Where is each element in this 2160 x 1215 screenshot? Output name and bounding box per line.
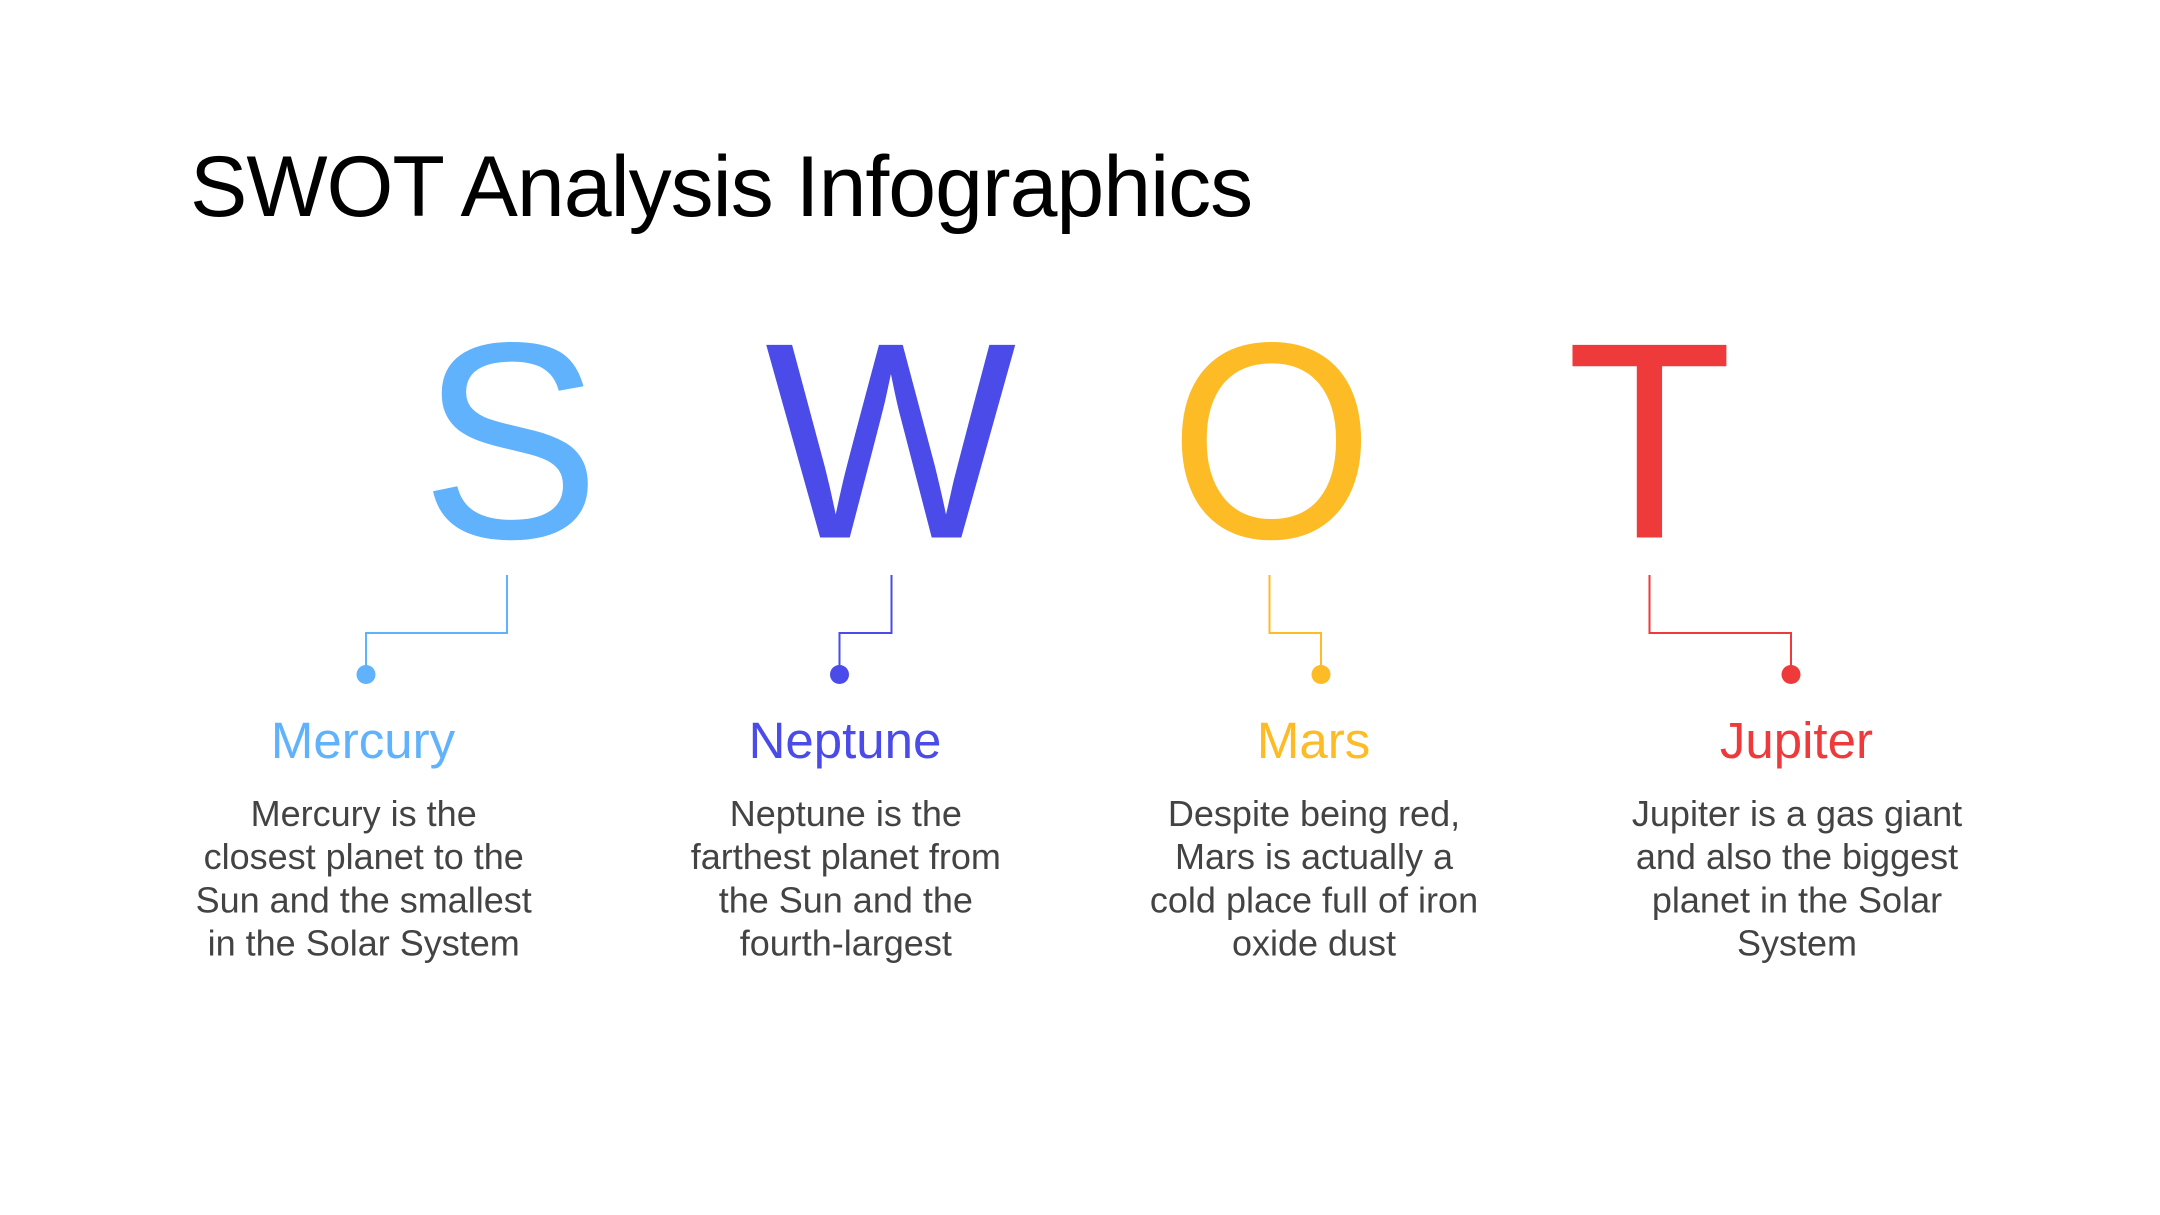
text block Mercury: in the Solar System	[208, 923, 520, 964]
text block Mars: oxide dust	[1232, 923, 1396, 964]
text block Neptune: fourth-largest	[740, 923, 952, 964]
panel: threats	[1566, 284, 1962, 964]
letter W: W	[765, 284, 1019, 597]
heading Mercury: Mercury	[271, 712, 456, 769]
panel: opportunities	[1150, 284, 1478, 964]
text block Mars: cold place full of iron	[1150, 879, 1478, 920]
heading Jupiter: Jupiter	[1720, 712, 1873, 769]
text block Neptune: Neptune is the	[730, 793, 962, 834]
panel: weaknesses	[691, 284, 1019, 964]
heading Mars: Mars	[1257, 712, 1370, 769]
connector T	[1650, 575, 1800, 684]
text block Mercury: Mercury is the	[251, 793, 477, 834]
panel: strengths	[196, 286, 600, 964]
text block Neptune: the Sun and the	[719, 879, 973, 920]
text block Mercury: Sun and the smallest	[196, 879, 532, 920]
connector S	[356, 575, 507, 684]
title: SWOT Analysis Infographics	[190, 139, 1252, 235]
letter T: T	[1566, 284, 1733, 597]
text block Mars: Despite being red,	[1168, 793, 1460, 834]
connector O	[1270, 575, 1330, 684]
letter O: O	[1169, 284, 1374, 597]
connector W	[830, 575, 892, 684]
letter S: S	[421, 286, 600, 598]
text block Jupiter: and also the biggest	[1636, 836, 1958, 877]
text block Jupiter: System	[1737, 923, 1857, 964]
text block Mercury: closest planet to the	[204, 836, 524, 877]
text block Neptune: farthest planet from	[691, 836, 1001, 877]
text block Jupiter: Jupiter is a gas giant	[1632, 793, 1962, 834]
heading Neptune: Neptune	[749, 712, 941, 769]
text block Jupiter: planet in the Solar	[1652, 879, 1942, 920]
text block Mars: Mars is actually a	[1175, 836, 1454, 877]
